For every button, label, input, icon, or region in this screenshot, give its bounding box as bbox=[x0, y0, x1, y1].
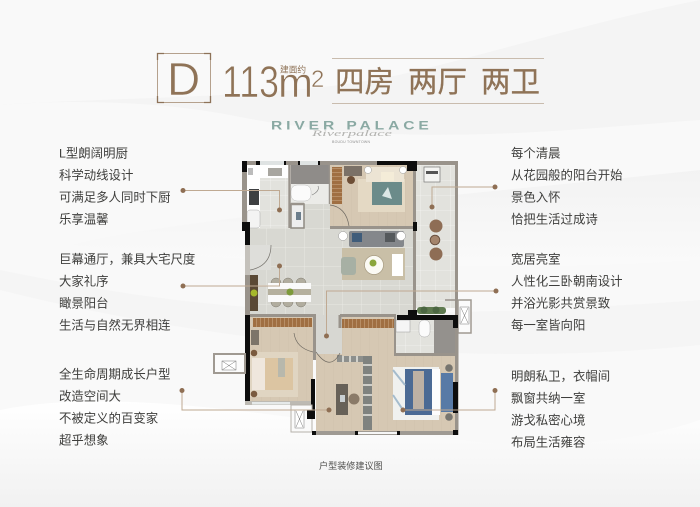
study room bbox=[311, 352, 376, 431]
brand logo: River Palace: RIVER PALACE bbox=[271, 118, 433, 132]
title: area: 113 bbox=[222, 58, 279, 107]
text block: balcony: 从花园般的阳台开始 bbox=[511, 168, 623, 182]
walls bbox=[242, 161, 458, 315]
brand logo: River Palace: BOUDU TOWNTOWN bbox=[332, 140, 370, 144]
dining set bbox=[250, 275, 311, 311]
title: unit letter badge bbox=[158, 53, 210, 105]
balcony furniture bbox=[424, 167, 442, 260]
main hall floor bbox=[250, 204, 414, 320]
text block: living hall bbox=[59, 252, 195, 332]
central corridor bbox=[313, 315, 342, 360]
text block: master suite bbox=[511, 368, 610, 450]
title: room layout: 两卫 bbox=[481, 66, 540, 99]
text block: kitchen: 科学动线设计 bbox=[59, 168, 133, 182]
text block: bedrooms: 每一室皆向阳 bbox=[511, 318, 585, 332]
text block: living hall: 大家礼序 bbox=[59, 274, 109, 288]
text block: kitchen: L型朗阔明厨 bbox=[59, 146, 128, 160]
bathroom one bbox=[290, 165, 330, 228]
text block: flexible layout: 改造空间大 bbox=[59, 390, 121, 404]
master bedroom bbox=[330, 165, 413, 227]
text block: balcony bbox=[511, 146, 623, 226]
text block: kitchen: 可满足多人同时下厨 bbox=[59, 190, 171, 204]
title: room layout bbox=[332, 58, 544, 104]
text block: kitchen bbox=[59, 146, 171, 226]
living room furniture bbox=[338, 231, 406, 280]
text block: balcony: 每个清晨 bbox=[511, 146, 561, 160]
bathroom two bbox=[394, 310, 458, 356]
text block: bedrooms bbox=[511, 252, 623, 332]
title: unit letter badge: D bbox=[167, 53, 200, 105]
brand logo: River Palace: Riverpalace bbox=[310, 128, 392, 138]
small south balcony bbox=[291, 405, 315, 432]
title: room layout: 四房 bbox=[335, 66, 394, 99]
left bedroom bbox=[245, 314, 316, 405]
planter bbox=[417, 306, 446, 314]
text block: bedrooms: 并浴光影共赏景致 bbox=[511, 296, 610, 310]
text block: master suite: 游戈私密心境 bbox=[511, 412, 585, 428]
text block: flexible layout: 全生命周期成长户型 bbox=[59, 366, 171, 382]
title: area: m bbox=[278, 59, 313, 106]
caption: 户型装修建议图 bbox=[319, 460, 383, 471]
entry door bbox=[250, 245, 271, 270]
text block: master suite: 明朗私卫，衣帽间 bbox=[511, 368, 610, 384]
balcony floor bbox=[416, 165, 456, 308]
text block: master suite: 飘窗共纳一室 bbox=[511, 390, 585, 406]
kitchen bbox=[247, 165, 288, 228]
south walls and window bbox=[312, 315, 458, 435]
text block: living hall: 瞰景阳台 bbox=[59, 296, 109, 310]
text block: master suite: 布局生活雍容 bbox=[511, 434, 585, 450]
text block: living hall: 巨幕通厅，兼具大宅尺度 bbox=[59, 252, 195, 266]
leader lines and dots bbox=[180, 184, 498, 412]
text block: flexible layout: 不被定义的百变家 bbox=[59, 410, 158, 426]
floor plan bbox=[214, 161, 471, 435]
left air-conditioner ledge bbox=[214, 354, 245, 373]
title: area bbox=[222, 58, 324, 107]
title: area: 2 bbox=[311, 66, 324, 93]
text block: kitchen: 乐享温馨 bbox=[59, 212, 109, 226]
title: area: 建面约 bbox=[280, 64, 306, 74]
text block: flexible layout: 超乎想象 bbox=[59, 432, 109, 448]
text block: balcony: 景色入怀 bbox=[511, 190, 561, 204]
brand logo: River Palace bbox=[271, 118, 433, 144]
side balcony air-conditioner bbox=[445, 300, 471, 333]
text block: balcony: 恰把生活过成诗 bbox=[511, 212, 598, 226]
title: room layout: 两厅 bbox=[408, 66, 467, 99]
text block: bedrooms: 宽居亮室 bbox=[511, 252, 561, 266]
text block: flexible layout bbox=[59, 366, 171, 448]
right bedroom with wardrobe bbox=[340, 314, 455, 431]
text block: bedrooms: 人性化三卧朝南设计 bbox=[511, 274, 623, 288]
text block: living hall: 生活与自然无界相连 bbox=[59, 318, 171, 332]
